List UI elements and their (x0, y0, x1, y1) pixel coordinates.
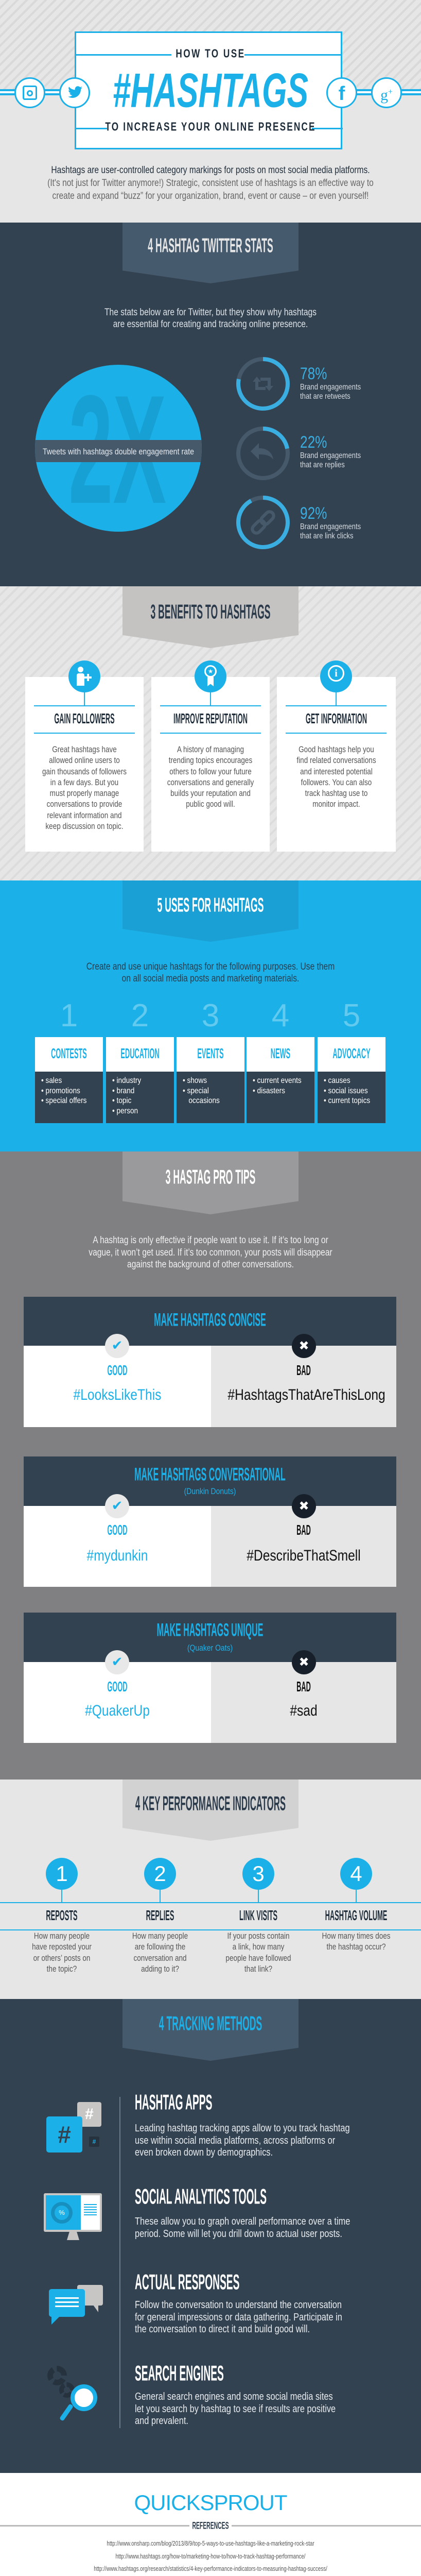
method: actual responses: the conversation to direct it and build good will. (135, 2324, 310, 2335)
section: tracking methods (0, 1999, 421, 2473)
icon: google plus: g+ (380, 87, 393, 104)
column: education: • industry (112, 1076, 141, 1085)
intro (86, 961, 335, 984)
method: social analytics tools: % (59, 2209, 65, 2216)
tip card: concise: MAKE HASHTAGS CONCISE (154, 1311, 266, 1330)
kpi: replies: conversation and (133, 1954, 187, 1963)
icon: instagram (14, 77, 45, 108)
column: news: NEWS (271, 1046, 290, 1062)
numbers: 3 (202, 998, 219, 1033)
card: gain followers: in a few days. But you (50, 778, 118, 787)
intro: The stats below are for Twitter, but they show why hashtags (104, 307, 317, 318)
tip card: unique: ✔ (112, 1654, 122, 1670)
tip card: concise (24, 1297, 396, 1427)
card: get information: find related conversations (296, 756, 376, 765)
method: search engines: and prevalent. (135, 2415, 188, 2427)
column: events: EVENTS (197, 1046, 224, 1062)
tip card: concise: ✖ (299, 1338, 309, 1353)
icon: ribbon (195, 660, 226, 692)
column: advocacy: • causes (324, 1076, 350, 1085)
method: search engines (47, 2362, 336, 2427)
section: 5 uses (0, 880, 421, 1151)
kpi: link visits: LINK VISITS (239, 1908, 277, 1924)
method: hashtag apps: Leading hashtag tracking apps allow to you track hashtag (135, 2123, 350, 2134)
column: education: • person (112, 1107, 138, 1115)
column: education (106, 1037, 174, 1123)
column: news: • disasters (253, 1086, 285, 1095)
tip card: concise: #LooksLikeThis (74, 1386, 161, 1403)
stat 78%: Brand engagements (300, 383, 361, 392)
intro: on all social media posts and marketing materials. (122, 973, 299, 984)
card: get information: and interested potential (300, 767, 373, 776)
kpi: replies (132, 1858, 188, 1974)
column: news: • current events (253, 1076, 302, 1085)
method: hashtag apps: HASHTAG APPS (135, 2091, 212, 2115)
tip card: conversational (24, 1456, 396, 1587)
intro text: (It's not just for Twitter anymore!) Strategic, consistent use of hashtags is an effective way to (47, 178, 374, 189)
heading: 4 TRACKING METHODS (159, 2012, 262, 2035)
kpi: reposts: 1 (56, 1861, 68, 1886)
section: benefits (0, 586, 421, 880)
method: hashtag apps (46, 2091, 350, 2158)
logo: QUICKSPROUT (134, 2490, 287, 2515)
section: KPIs (0, 1780, 421, 1973)
intro: against the background of other conversations. (127, 1259, 294, 1270)
kpi: link visits: people have followed (225, 1954, 291, 1963)
kpi: replies: adding to it? (141, 1964, 179, 1974)
references list (94, 2540, 327, 2572)
icon: facebook (326, 77, 357, 108)
intro text (47, 165, 374, 201)
intro text: create and expand “buzz” for your organization, brand, event or cause – or even yourself! (52, 191, 369, 201)
stat 22%: 22% (300, 433, 327, 451)
column: advocacy: • current topics (324, 1096, 370, 1105)
tip card: conversational: #DescribeThatSmell (247, 1547, 361, 1564)
method: search engines: General search engines and some social media sites (135, 2391, 333, 2402)
references list: http://www.onsharp.com/blog/2013/8/9/top-5-ways-to-use-hashtags-like-a-marketing-rock-star (107, 2540, 314, 2547)
method: actual responses (49, 2270, 342, 2335)
card: gain followers: Great hashtags have (52, 745, 117, 754)
method: search engines: SEARCH ENGINES (135, 2362, 224, 2386)
references list: http://www.hashtags.org/research/statistics/4-key-performance-indicators-to-measuring-hashtag-success/ (94, 2565, 327, 2572)
numbers: 1 (60, 998, 78, 1033)
kpi: link visits (225, 1858, 291, 1974)
card: improve reputation (151, 677, 270, 852)
column: contests: • promotions (41, 1086, 80, 1095)
card: improve reputation: public good will. (186, 800, 235, 809)
tip card: unique: (Quaker Oats) (187, 1643, 233, 1653)
icon: google plus (371, 77, 402, 108)
kpi: reposts: or others’ posts on (33, 1954, 90, 1963)
tip card: conversational: #mydunkin (87, 1547, 148, 1564)
method: actual responses: Follow the conversation to understand the conversation (135, 2299, 342, 2311)
method: social analytics tools: SOCIAL ANALYTICS TOOLS (135, 2184, 267, 2209)
numbers (60, 998, 360, 1033)
tip card: conversational: MAKE HASHTAGS CONVERSATIONAL (134, 1465, 286, 1485)
icon: ribbon: ★ (208, 668, 213, 675)
numbers: 4 (272, 998, 289, 1033)
card: get information: monitor impact. (312, 800, 360, 809)
method: hashtag apps: even broken down by demographics. (135, 2147, 273, 2158)
kpi: hashtag volume: How many times does (322, 1931, 391, 1941)
intro text: Hashtags are user-controlled category markings for posts on most social media platforms. (51, 165, 370, 176)
heading: how to use: HOW TO USE (176, 47, 245, 60)
tip card: unique: MAKE HASHTAGS UNIQUE (157, 1621, 263, 1640)
section: twitter stats (0, 223, 421, 586)
tip card: unique: GOOD (107, 1680, 128, 1695)
method: social analytics tools: These allow you to graph overall performance over a time (135, 2216, 350, 2227)
tip card: unique: ✖ (299, 1655, 309, 1669)
method: social analytics tools (44, 2184, 350, 2240)
column: events: • special (183, 1086, 209, 1095)
kpi: link visits: that link? (244, 1964, 272, 1974)
tip card: conversational: (Dunkin Donuts) (184, 1486, 236, 1496)
column: education: • brand (112, 1086, 134, 1095)
heading: 3 BENEFITS TO HASHTAGS (150, 600, 271, 623)
column: advocacy (318, 1037, 385, 1123)
intro (89, 1235, 332, 1270)
card: improve reputation: builds your reputation and (170, 789, 251, 798)
column: news (247, 1037, 314, 1123)
card: gain followers: relevant information and (47, 811, 122, 820)
kpi: hashtag volume (322, 1858, 391, 1952)
card: improve reputation: IMPROVE REPUTATION (173, 711, 248, 727)
title: #HASHTAGS: #HASHTAGS (113, 63, 308, 117)
column: education: EDUCATION (120, 1046, 160, 1062)
tip card: unique: BAD (296, 1680, 311, 1695)
card: gain followers: conversations to provide (47, 800, 122, 809)
kpi: link visits: a link, how many (233, 1942, 284, 1952)
card: improve reputation: A history of managing (177, 745, 244, 754)
stat 22% (236, 427, 361, 480)
kpi: reposts (32, 1858, 92, 1974)
stat 92%: that are link clicks (300, 532, 354, 540)
column: advocacy: • social issues (324, 1086, 368, 1095)
tip card: concise: #HashtagsThatAreThisLong (227, 1386, 385, 1403)
banner (122, 1151, 299, 1214)
icon: twitter (59, 77, 90, 108)
heading: 4 KEY PERFORMANCE INDICATORS (135, 1793, 286, 1815)
card: improve reputation: others to follow your future (169, 767, 252, 776)
card: get information: followers. You can also (301, 778, 372, 787)
banner (122, 880, 299, 942)
tip card: concise: GOOD (107, 1363, 128, 1379)
heading: 3 HASTAG PRO TIPS (166, 1165, 255, 1188)
column: advocacy: ADVOCACY (332, 1046, 371, 1062)
icon: facebook: f (339, 83, 345, 105)
method: hashtag apps: # (93, 2138, 96, 2145)
column: contests: • sales (41, 1076, 62, 1085)
column: events: • shows (183, 1076, 207, 1085)
stat 78%: that are retweets (300, 392, 350, 401)
column: events: occasions (188, 1096, 220, 1105)
card: get information (277, 677, 396, 852)
column: education: • topic (112, 1096, 131, 1105)
tip card: conversational: ✔ (112, 1498, 122, 1514)
kpi: replies: are following the (135, 1942, 185, 1952)
tip card: unique (24, 1613, 396, 1743)
subtitle: TO INCREASE YOUR ONLINE PRESENCE (105, 121, 316, 133)
banner (122, 223, 299, 283)
card: get information: GET INFORMATION (306, 711, 367, 727)
card: get information: track hashtag use to (305, 789, 367, 798)
kpi: reposts: REPOSTS (46, 1908, 78, 1924)
tip card: unique: #sad (290, 1702, 318, 1719)
tip card: unique: #QuakerUp (85, 1702, 150, 1719)
heading: 5 USES FOR HASHTAGS (157, 893, 264, 916)
title box (75, 31, 342, 149)
card: gain followers: allowed online users to (49, 756, 120, 765)
tip card: conversational: GOOD (107, 1523, 128, 1538)
banner (122, 586, 299, 648)
kpi: reposts: have reposted your (32, 1942, 92, 1952)
stat 92%: 92% (300, 504, 327, 522)
card: gain followers: keep discussion on topic. (45, 822, 124, 831)
icon: info: i (335, 668, 338, 679)
stat 78%: 78% (300, 364, 327, 383)
card: get information: Good hashtags help you (299, 745, 374, 754)
references heading: REFERENCES (192, 2519, 229, 2531)
stat 22%: that are replies (300, 461, 345, 469)
intro: vague, it won’t get used. If it’s too common, your posts will disappear (89, 1247, 332, 1258)
stat 78% (236, 357, 361, 411)
column: events (177, 1037, 244, 1123)
banner (122, 1999, 299, 2061)
footer (0, 2473, 421, 2576)
card: gain followers: GAIN FOLLOWERS (54, 711, 115, 727)
method: search engines: let you search by hashtag to see if results are positive (135, 2403, 336, 2414)
kpi: hashtag volume: HASHTAG VOLUME (325, 1908, 387, 1924)
kpi: replies: REPLIES (146, 1908, 174, 1924)
numbers: 2 (131, 998, 149, 1033)
tip card: concise: ✔ (112, 1338, 122, 1353)
intro: Create and use unique hashtags for the following purposes. Use them (86, 961, 335, 972)
card: improve reputation: trending topics encourages (169, 756, 252, 765)
tip card: conversational: ✖ (299, 1499, 309, 1513)
column: contests (35, 1037, 103, 1123)
method: actual responses: for general impressions or data gathering. Participate in (135, 2311, 342, 2323)
section: pro tips (0, 1151, 421, 1780)
intro: A hashtag is only effective if people want to use it. If it’s too long or (93, 1235, 328, 1246)
header section (0, 0, 421, 223)
icon: add follower (68, 660, 100, 692)
method: hashtag apps: # (85, 2106, 94, 2123)
banner (122, 1780, 299, 1841)
method: actual responses: ACTUAL RESPONSES (135, 2270, 239, 2295)
method: hashtag apps: # (58, 2121, 71, 2148)
stat 22%: Brand engagements (300, 451, 361, 460)
heading: 4 HASHTAG TWITTER STATS (148, 234, 273, 257)
numbers: 5 (343, 998, 360, 1033)
method: social analytics tools: period. Some will let you drill down to actual user posts. (135, 2228, 342, 2239)
kpi: replies: How many people (132, 1931, 188, 1941)
kpi: link visits: 3 (252, 1861, 265, 1886)
column: contests: CONTESTS (51, 1046, 87, 1062)
kpi: hashtag volume: 4 (350, 1861, 362, 1886)
card: gain followers: must properly manage (50, 789, 119, 798)
stat 92% (236, 496, 361, 549)
tip card: conversational: BAD (296, 1523, 311, 1538)
kpi: reposts: How many people (34, 1931, 90, 1941)
kpi: hashtag volume: the hashtag occur? (326, 1942, 386, 1952)
intro (104, 307, 317, 330)
kpi: replies: 2 (154, 1861, 166, 1886)
card: improve reputation: conversations and generally (167, 778, 254, 787)
card: gain followers (25, 677, 144, 852)
method: hashtag apps: use within social media platforms, across platforms or (135, 2135, 335, 2146)
tip card: concise: BAD (296, 1363, 311, 1379)
stat 92%: Brand engagements (300, 522, 361, 531)
intro: are essential for creating and tracking online presence. (113, 319, 308, 330)
kpi: reposts: the topic? (47, 1964, 77, 1974)
card: gain followers: gain thousands of followers (42, 767, 127, 776)
references list: http://www.hashtags.org/how-to/marketing-how-to/how-to-track-hashtag-performance/ (115, 2552, 306, 2560)
column: contests: • special offers (41, 1096, 86, 1105)
icon: info (320, 660, 352, 692)
kpi: link visits: If your posts contain (227, 1931, 290, 1941)
